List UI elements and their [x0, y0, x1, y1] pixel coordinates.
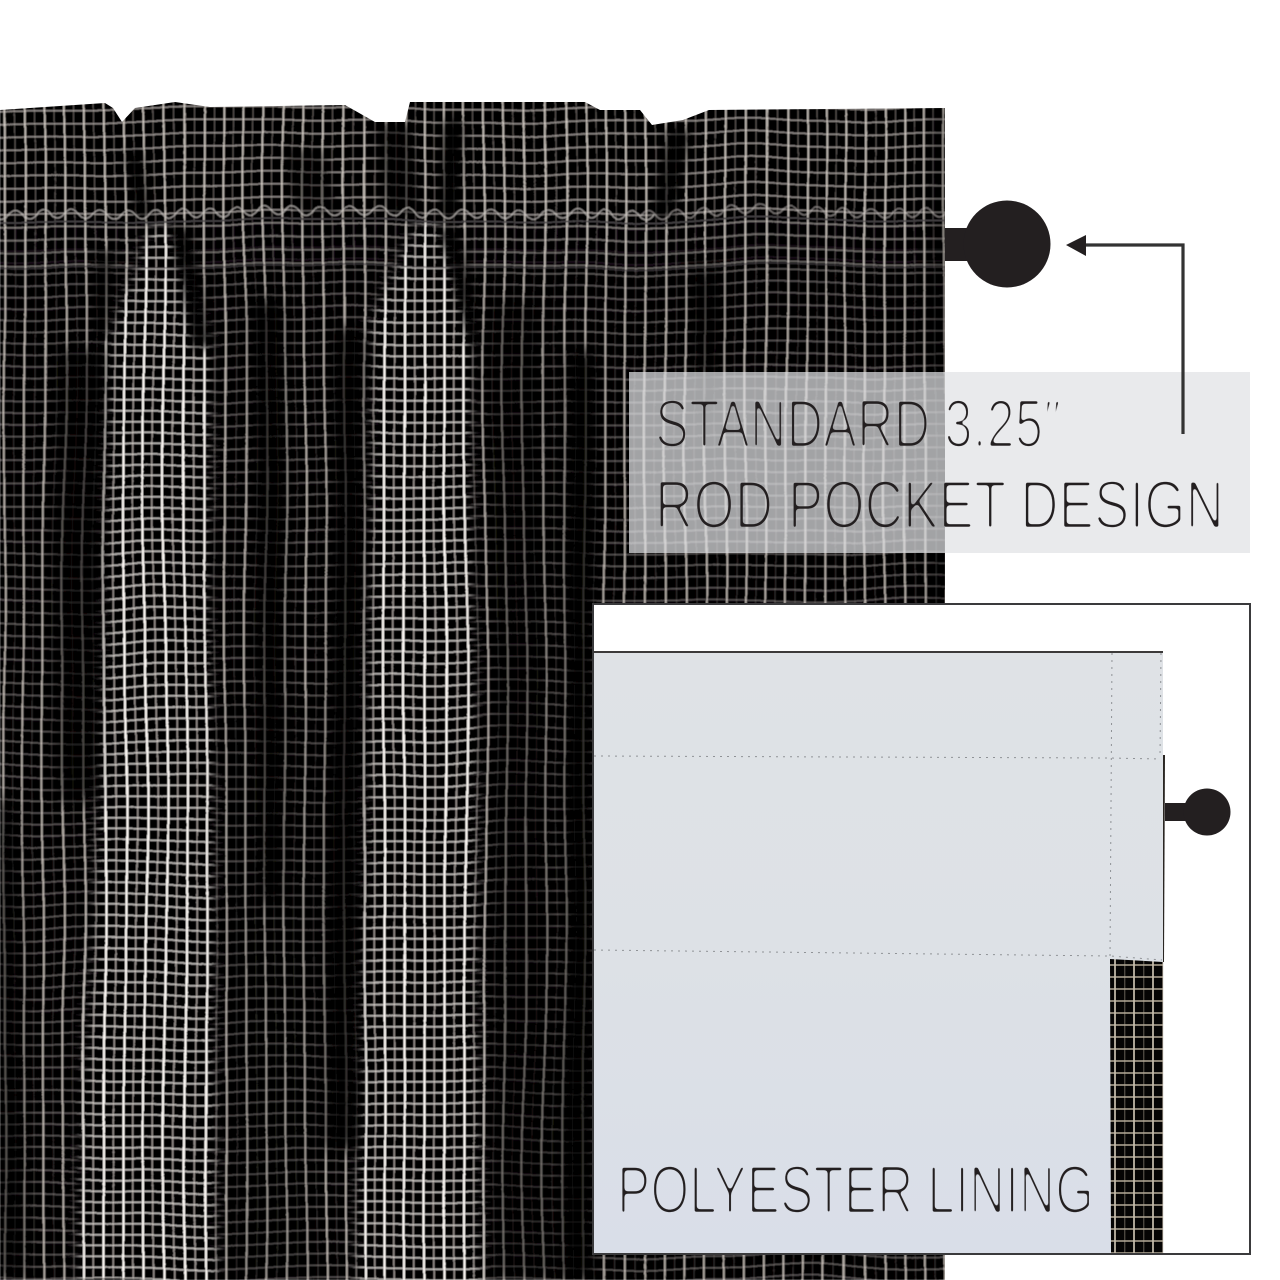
header ruffle above rod pocket seam	[0, 90, 970, 268]
panel: polyester lining inset	[593, 604, 1250, 1254]
icon: small curtain rod end	[1165, 788, 1230, 836]
arrow pointing to rod	[1066, 235, 1183, 434]
callout text: standard rod pocket design: STANDARD 3.25″	[655, 386, 1061, 462]
lining stitching	[594, 653, 1162, 960]
callout text: polyester lining: POLYESTER LINING	[617, 1152, 1094, 1228]
rod pocket seam	[0, 208, 962, 267]
lining fabric back edge	[1162, 755, 1165, 962]
fabric shading folds	[0, 110, 950, 1280]
curtain fabric panel	[0, 80, 970, 1280]
lining fabric	[594, 652, 1163, 1253]
icon: curtain rod end	[945, 200, 1050, 288]
translucent label band	[629, 372, 1250, 553]
callout text: standard rod pocket design	[655, 386, 1224, 543]
bright fabric folds	[60, 220, 500, 1280]
plaid fabric strip	[1110, 959, 1163, 1253]
